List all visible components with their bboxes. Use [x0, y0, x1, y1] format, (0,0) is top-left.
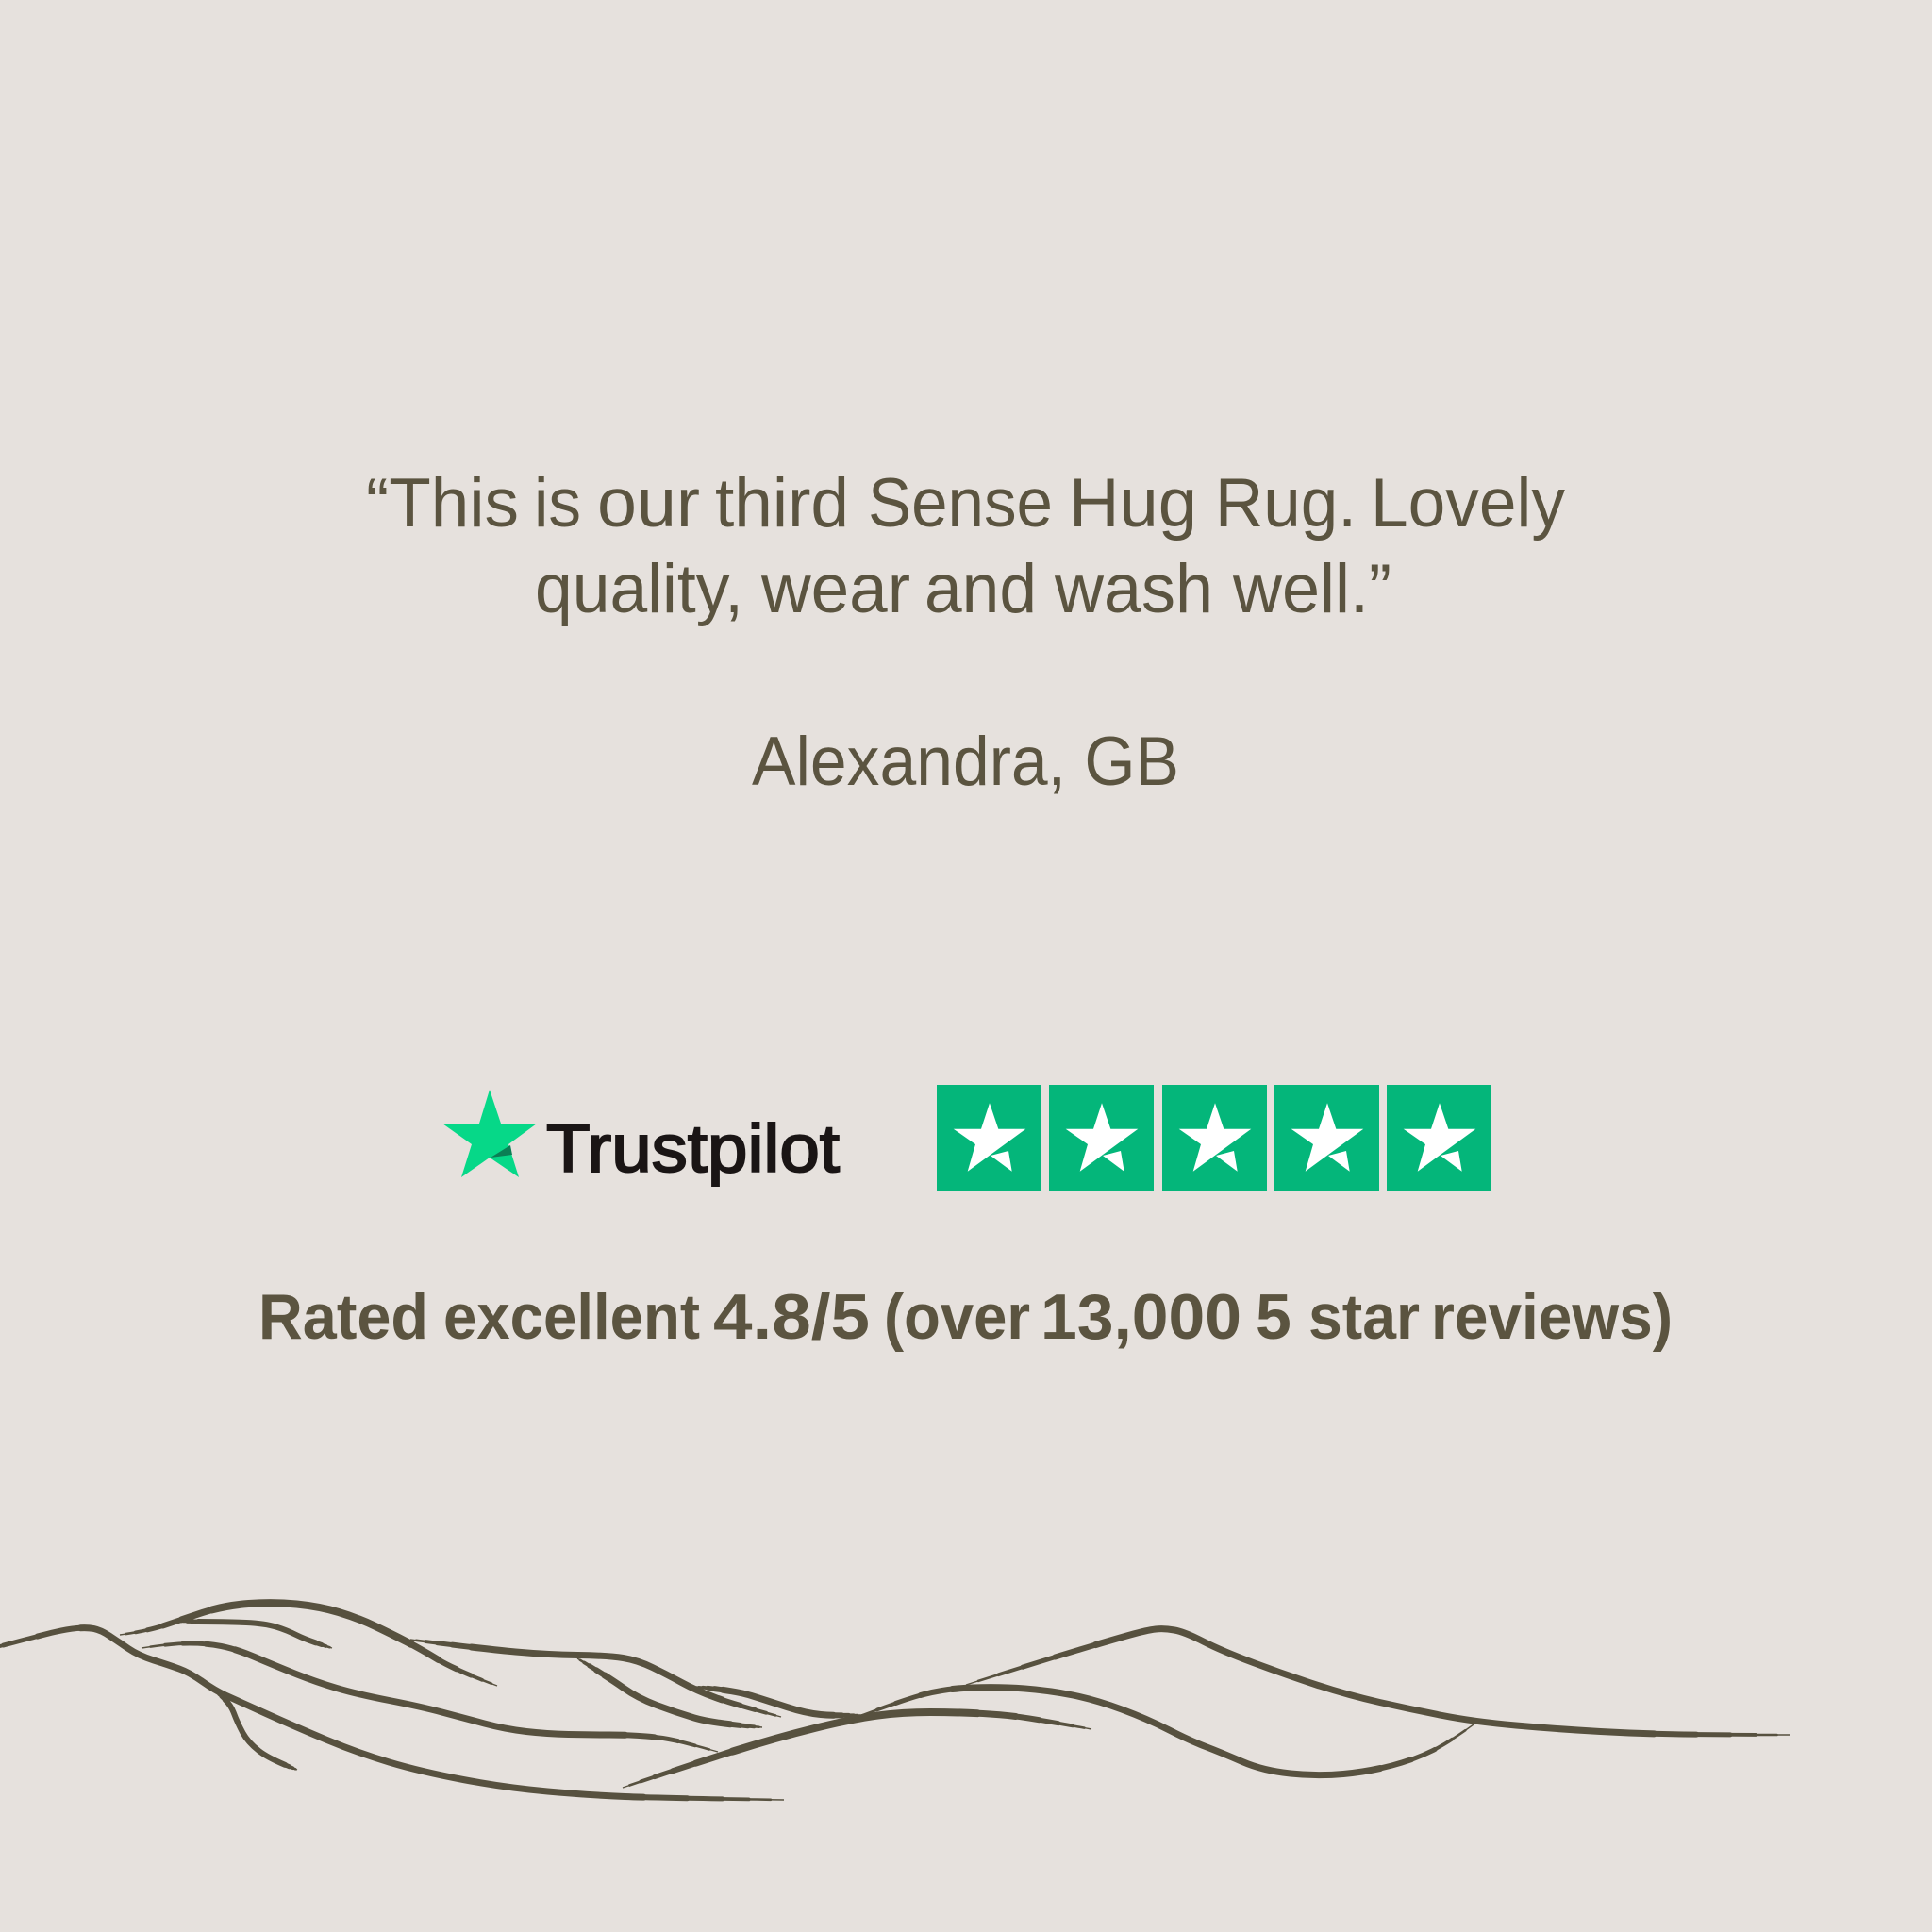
- trustpilot wordmark: Trustpilot: [546, 1112, 840, 1187]
- testimonial quote: Lovely: [1371, 465, 1565, 541]
- icon: star box 1: [937, 1085, 1041, 1191]
- contour: inner hump stroke: [181, 1622, 332, 1648]
- testimonial quote: quality,: [535, 551, 743, 627]
- contour: left ridge and long base line: [0, 1628, 784, 1800]
- icon: star box 5: [1387, 1085, 1491, 1191]
- contour: valley stroke: [696, 1687, 860, 1715]
- rating summary: star: [1308, 1281, 1420, 1353]
- rating summary: (over: [884, 1281, 1030, 1353]
- rating summary: Rated: [258, 1281, 428, 1353]
- contour: rounded hump: [120, 1603, 497, 1686]
- testimonial quote: our: [597, 465, 700, 541]
- trustpilot logo: [442, 1090, 840, 1187]
- testimonial quote: well.”: [1232, 551, 1391, 627]
- reviewer name: Alexandra, GB: [752, 724, 1179, 800]
- line art: landscape contours: [0, 1603, 1790, 1800]
- rating summary: reviews): [1431, 1281, 1673, 1353]
- contour: lower arc: [623, 1712, 1091, 1788]
- contour: central branch: [577, 1658, 762, 1727]
- testimonial quote: Sense: [868, 465, 1053, 541]
- rating summary: 5: [1256, 1281, 1291, 1353]
- rating summary: 4.8/5: [713, 1281, 870, 1353]
- contour: right mountain and horizon: [966, 1629, 1790, 1735]
- contour: short downward branch: [215, 1691, 297, 1770]
- contour: upper arc into bowl: [853, 1688, 1474, 1775]
- five star rating: [937, 1085, 1491, 1191]
- icon: star box 4: [1274, 1085, 1379, 1191]
- testimonial quote: [366, 465, 1565, 627]
- testimonial quote: Hug: [1069, 465, 1197, 541]
- icon: trustpilot star: [442, 1090, 537, 1177]
- icon: star box 3: [1162, 1085, 1267, 1191]
- rating summary: 13,000: [1041, 1281, 1241, 1353]
- testimonial quote: third: [715, 465, 849, 541]
- testimonial quote: is: [534, 465, 581, 541]
- testimonial quote: wear: [760, 551, 910, 627]
- contour: middle long stroke: [142, 1643, 718, 1752]
- contour: central ridge: [410, 1640, 781, 1717]
- testimonial quote: and: [924, 551, 1037, 627]
- testimonial quote: Rug.: [1215, 465, 1357, 541]
- rating summary: [258, 1281, 1673, 1353]
- testimonial quote: “This: [366, 465, 519, 541]
- rating summary: excellent: [443, 1281, 700, 1353]
- testimonial quote: wash: [1054, 551, 1213, 627]
- icon: star box 2: [1049, 1085, 1154, 1191]
